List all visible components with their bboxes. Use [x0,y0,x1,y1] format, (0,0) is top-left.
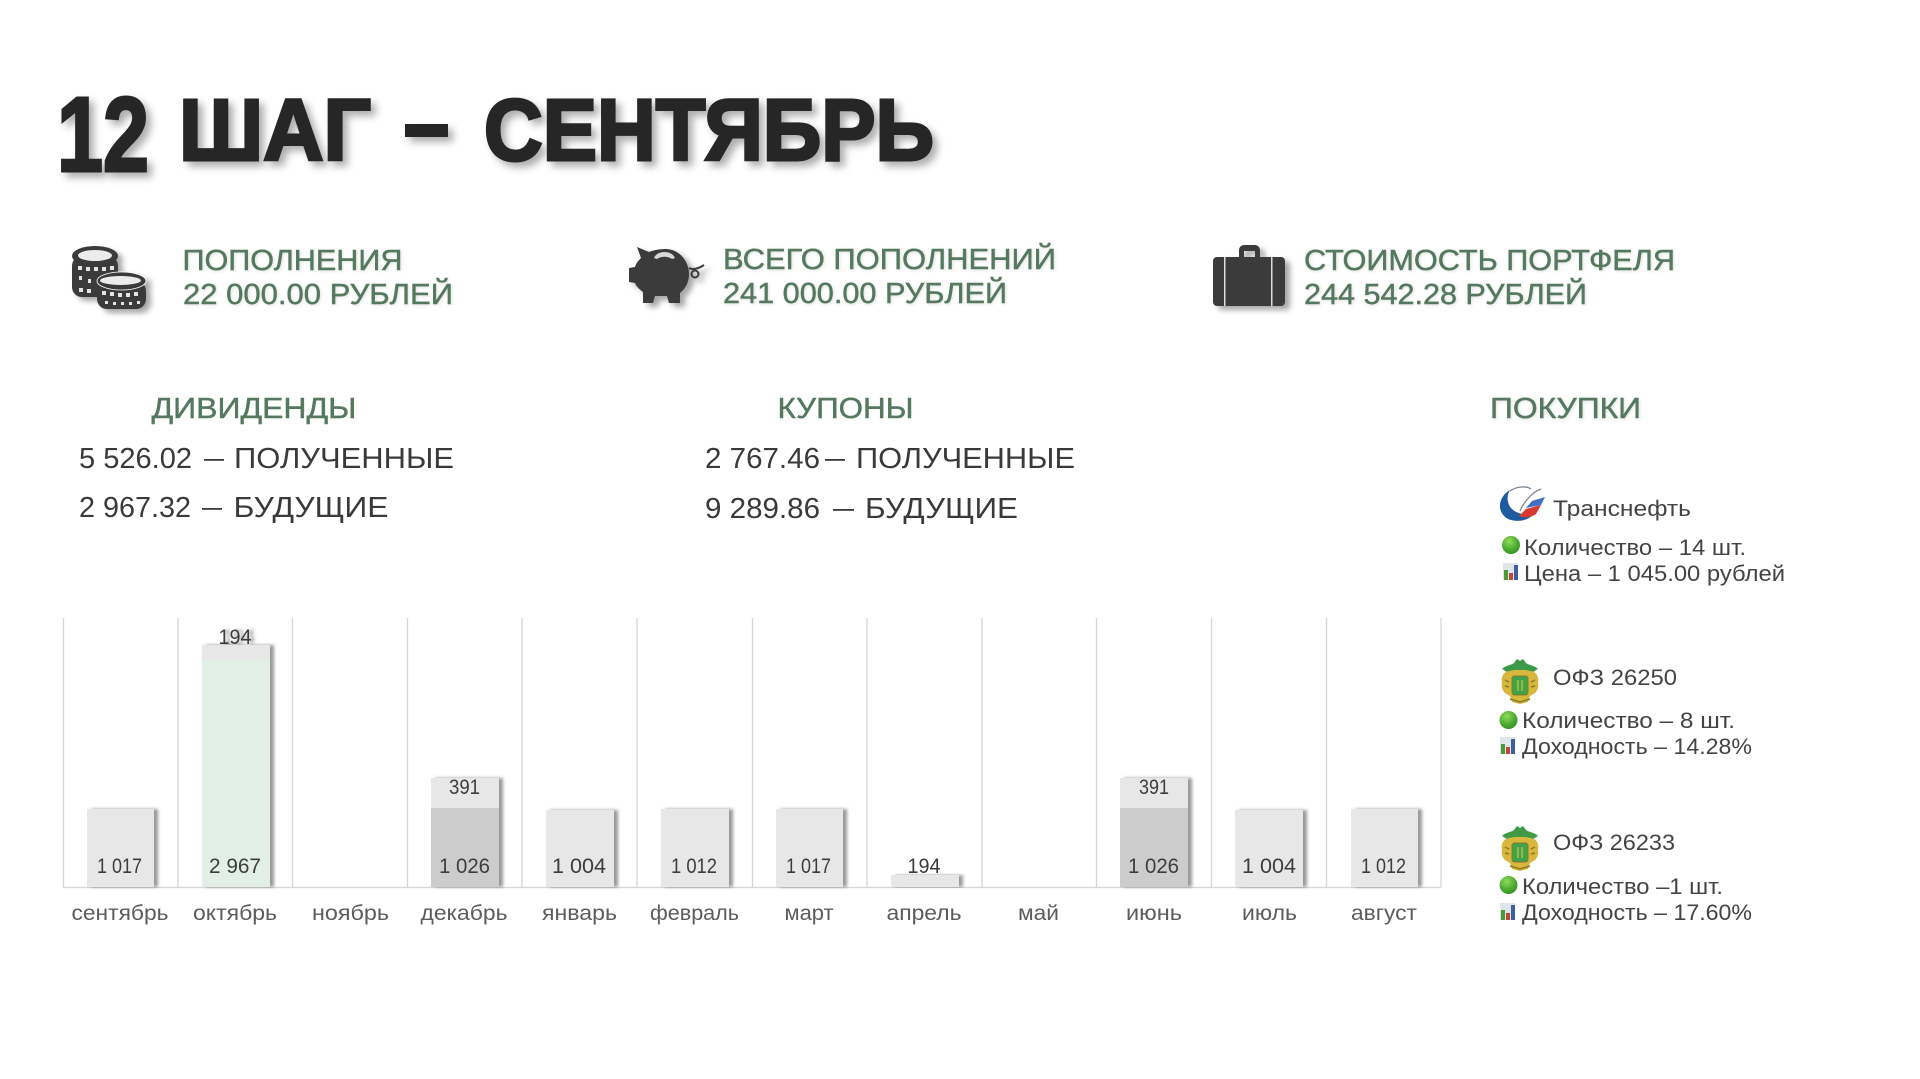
bar: март [776,809,843,887]
bar: сентябрь: 1 017 [97,855,142,878]
icon: Minfin emblem [1502,659,1538,704]
axis labels: months: апрель [886,902,962,925]
bar: октябрь: 2 967 [209,855,261,878]
stat: всего пополнений [723,242,1056,310]
purchase: Транснефть [1500,487,1785,586]
received coupons [705,443,1075,475]
axis labels: months: ноябрь [312,902,389,925]
bar: сентябрь [87,809,154,887]
bar: июнь: 1 026 [1128,855,1179,878]
title: СЕНТЯБРЬ [484,82,934,179]
purchase: Транснефть: Цена – 1 045.00 рублей [1524,561,1785,586]
stat: стоимость портфеля: СТОИМОСТЬ ПОРТФЕЛЯ [1304,245,1675,277]
axis labels: months: январь [542,902,617,925]
bar: декабрь: 1 026 [439,855,490,878]
icon: bar chart [1500,737,1515,754]
bar: февраль [661,809,729,887]
stat: пополнения [182,245,453,311]
purchase: ОФЗ 26250: Доходность – 14.28% [1522,734,1752,759]
bar: февраль: 1 012 [671,855,717,878]
future dividends [79,492,388,524]
axis labels: months: май [1018,902,1059,925]
heading: покупки: ПОКУПКИ [1490,393,1641,425]
stat: пополнения: 22 000.00 РУБЛЕЙ [183,277,453,311]
stat: всего пополнений: 241 000.00 РУБЛЕЙ [723,276,1007,310]
icon: Minfin emblem [1502,826,1538,871]
axis labels: months: октябрь [193,902,277,925]
purchase: ОФЗ 26250: ОФЗ 26250 [1553,665,1677,690]
panel: покупки [1490,393,1785,925]
axis labels: months: август [1351,902,1417,925]
icon: green dot [1500,711,1518,729]
stat: стоимость портфеля: 244 542.28 РУБЛЕЙ [1304,277,1587,311]
icon: piggy bank [629,247,704,303]
icon: briefcase [1213,245,1285,306]
bar: январь [546,810,614,887]
bar: август [1351,809,1418,887]
purchase: ОФЗ 26233: Доходность – 17.60% [1522,900,1752,925]
bar: август: 1 012 [1361,855,1406,878]
bar: октябрь: 194 [218,626,252,649]
bar: июнь [1120,776,1188,887]
purchase: ОФЗ 26233: ОФЗ 26233 [1553,830,1675,855]
future dividends: 2 967.32 [79,492,191,524]
future coupons [705,493,1018,525]
bar: март: 1 017 [786,855,831,878]
purchase: ОФЗ 26250: Количество – 8 шт. [1522,708,1735,733]
bar: апрель: 194 [908,855,941,878]
bar: июнь: 391 [1139,776,1169,799]
bar: январь: 1 004 [552,855,606,878]
bar: декабрь [431,776,499,887]
title: ШАГ [179,82,371,179]
received coupons: 2 767.46 [705,443,820,475]
icon: bar chart [1500,903,1515,920]
chart: monthly payouts [63,618,1441,925]
panel: дивиденды [79,393,454,524]
stat: всего пополнений: ВСЕГО ПОПОЛНЕНИЙ [723,242,1056,276]
received dividends [79,443,454,475]
bar: апрель [891,855,959,887]
axis labels: months: декабрь [420,902,508,925]
bar: октябрь [202,626,270,887]
title [57,76,934,194]
purchase: Транснефть: Количество – 14 шт. [1524,535,1746,560]
icon: bar chart [1503,563,1518,580]
heading: купоны: КУПОНЫ [778,393,914,425]
future coupons: БУДУЩИЕ [865,493,1018,525]
purchase: ОФЗ 26233 [1500,826,1752,925]
purchase: Транснефть: Транснефть [1553,496,1691,521]
axis labels: months: февраль [650,902,739,925]
stat: пополнения: ПОПОЛНЕНИЯ [182,245,402,277]
icon: Transneft logo [1500,487,1545,521]
bar: декабрь: 391 [449,776,480,799]
icon: green dot [1502,536,1520,554]
title: 12 [57,76,149,194]
purchase: ОФЗ 26233: Количество –1 шт. [1522,874,1723,899]
panel: купоны [705,393,1075,525]
icon: green dot [1500,876,1518,894]
received coupons: ПОЛУЧЕННЫЕ [856,443,1075,475]
received dividends: 5 526.02 [79,443,192,475]
axis labels: months: сентябрь [72,902,169,925]
stat: стоимость портфеля [1304,245,1675,311]
axis labels: months [72,902,1417,925]
future dividends: БУДУЩИЕ [234,492,388,524]
axis labels: months: июль [1242,902,1297,925]
axis labels: months: июнь [1126,902,1182,925]
icon: coins [72,246,146,309]
purchase: ОФЗ 26250 [1500,659,1752,759]
received dividends: ПОЛУЧЕННЫЕ [234,443,454,475]
heading: дивиденды: ДИВИДЕНДЫ [152,393,356,425]
bar: июль: 1 004 [1242,855,1296,878]
future coupons: 9 289.86 [705,493,820,525]
axis labels: months: март [784,902,834,925]
bar: июль [1235,810,1303,887]
